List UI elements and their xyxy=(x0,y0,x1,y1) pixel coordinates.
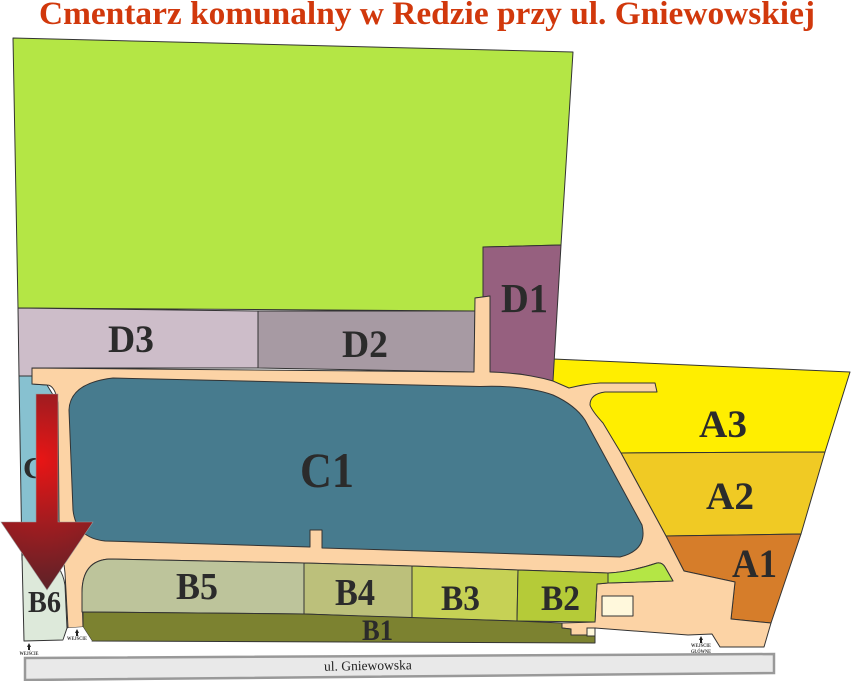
label: C1: C1 xyxy=(300,442,354,498)
entrance marker: left xyxy=(20,643,39,657)
plot: A2 xyxy=(621,452,825,536)
road: internal alleys xyxy=(32,296,771,647)
label: B4: B4 xyxy=(335,572,375,614)
label: B6: B6 xyxy=(28,584,61,619)
plot: D3 xyxy=(18,308,258,376)
building xyxy=(602,596,633,616)
label: A1: A1 xyxy=(732,541,777,586)
plot: B5 xyxy=(82,559,304,614)
arrow: red pointer xyxy=(1,394,93,590)
small cream square xyxy=(587,628,595,636)
street: ul. Gniewowska: ul. Gniewowska xyxy=(324,657,412,674)
label: A3: A3 xyxy=(699,403,747,446)
plot: C1 xyxy=(69,378,643,557)
label: C2: C xyxy=(23,450,45,485)
plot: B4 xyxy=(304,563,412,618)
plot: A1 xyxy=(666,534,801,623)
entrance marker: middle xyxy=(63,627,92,642)
label: B1: B1 xyxy=(362,614,393,647)
entrance marker: main xyxy=(691,636,712,655)
label: A2: A2 xyxy=(706,475,754,518)
label: B3: B3 xyxy=(441,578,480,618)
label: D3: D3 xyxy=(108,318,154,361)
plot: C2 xyxy=(19,376,64,560)
label: B5: B5 xyxy=(176,566,218,608)
entrance marker: main: GŁÓWNE xyxy=(691,649,712,655)
street: ul. Gniewowska xyxy=(25,654,774,680)
plot: A3 xyxy=(552,359,850,453)
plot: B3 xyxy=(412,566,518,621)
entrance marker: left: WEJŚCIE xyxy=(20,651,39,657)
plot: green strip near A1 xyxy=(608,563,673,583)
plot: B6 xyxy=(22,555,67,641)
plot: B1 xyxy=(83,612,595,643)
plot: D2 xyxy=(258,311,475,372)
label: B2: B2 xyxy=(541,578,580,618)
label: D2: D2 xyxy=(342,323,388,366)
label: D1: D1 xyxy=(501,275,548,321)
entrance marker: main: WEJŚCIE xyxy=(691,643,712,649)
plot: large green area xyxy=(13,38,573,311)
plot: B2 xyxy=(517,570,608,622)
plot: D1 xyxy=(483,245,561,381)
entrance marker: middle: WEJŚCIE xyxy=(67,636,88,642)
